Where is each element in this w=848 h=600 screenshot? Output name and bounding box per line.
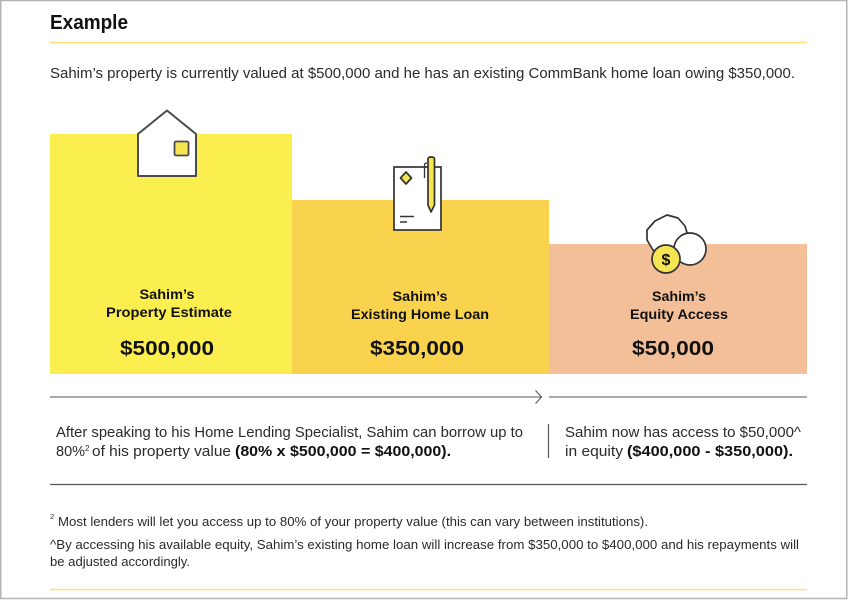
text block: borrowing explanation: After speaking to his Home Lending Specialist, Sahim can borrow up to [56,425,523,441]
title: Example [50,12,128,34]
icon: coins: $ [662,252,671,269]
footnotes: 2 [50,512,54,521]
label: equity access: Sahim’s [652,288,706,304]
text block: equity result: Sahim now has access to $50,000^ [565,425,801,441]
text block: borrowing explanation: of his property value [92,444,231,460]
panel: property estimate [50,110,292,374]
footnotes [50,512,799,569]
label: existing home loan: Sahim’s [392,288,448,304]
footnotes: be adjusted accordingly. [50,555,190,569]
panel: existing home loan [292,157,549,374]
value: $500,000: $500,000 [120,338,214,360]
panel: equity access [549,215,807,374]
label: property estimate: Sahim’s [140,286,195,302]
text block: equity result [565,425,801,460]
panel: property estimate: Property Estimate [106,304,232,320]
icon: house [138,110,196,176]
footnotes: Most lenders will let you access up to 80% of your property value (this can vary between institutions). [58,515,648,529]
icon: coins [647,215,706,273]
text block: borrowing explanation [56,425,523,460]
value: $50,000: $50,000 [632,338,714,360]
panel: existing home loan: Existing Home Loan [351,306,489,322]
text block: borrowing explanation: 2 [85,444,90,453]
text block: equity result: in equity [565,444,624,460]
value: $350,000: $350,000 [370,338,464,360]
text block: borrowing explanation: 80% [56,444,85,460]
intro text: Sahim’s property is currently valued at $500,000 and he has an existing CommBank home loan owing $350,000. [50,66,795,82]
panel: equity access: Equity Access [630,306,728,322]
text block: equity result: ($400,000 - $350,000). [627,444,793,460]
footnotes: ^By accessing his available equity, Sahim’s existing home loan will increase from $350,000 to $400,000 and his repayments will [50,538,799,552]
icon: document and pen [394,157,441,230]
arrow [50,390,807,404]
text block: borrowing explanation: (80% x $500,000 = $400,000). [235,444,451,460]
